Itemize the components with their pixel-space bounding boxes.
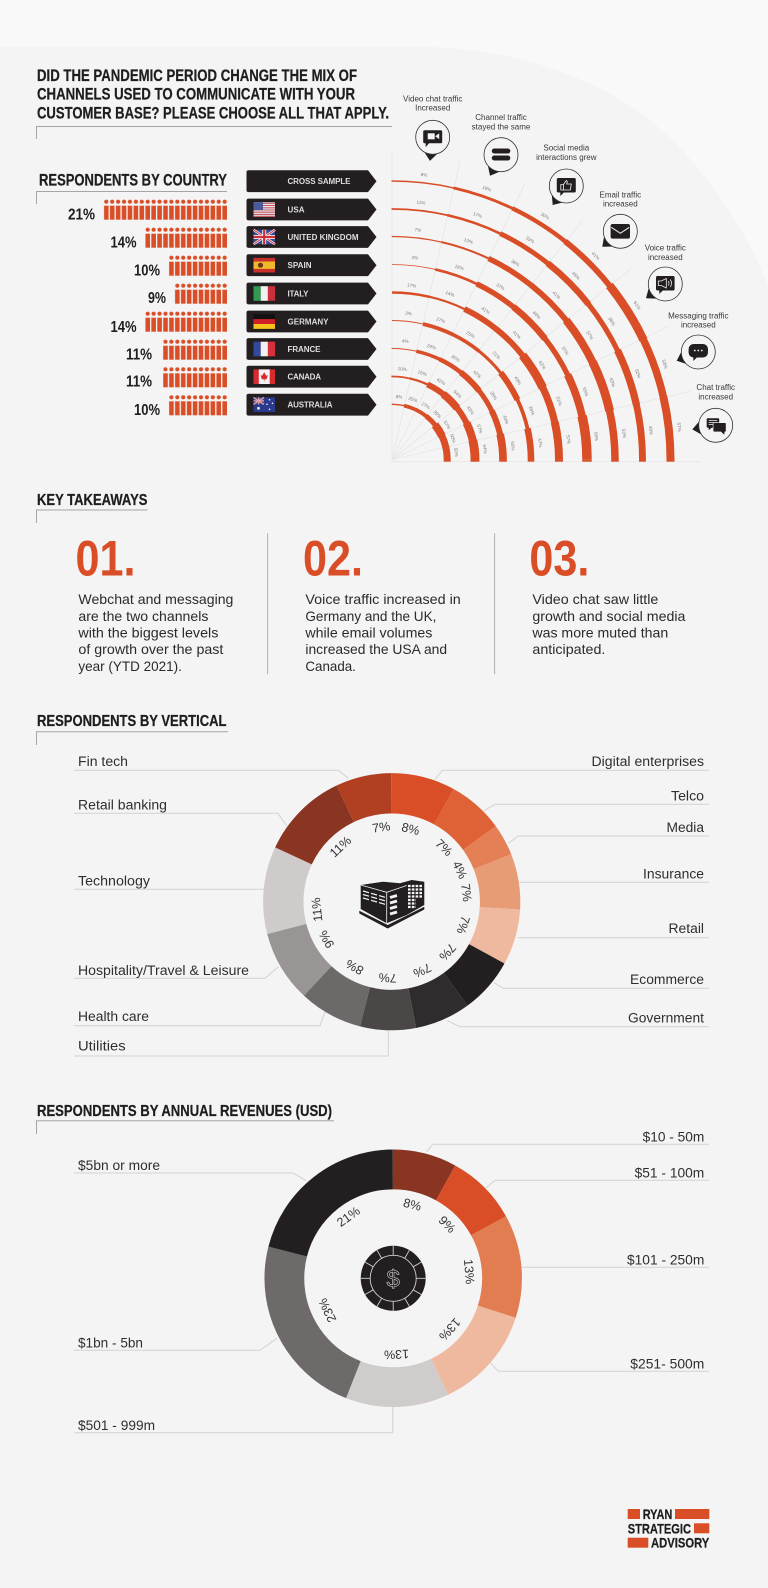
ring: Australia — [314, 382, 470, 537]
takeaway 03: 03. — [529, 531, 589, 587]
takeaway 01 — [76, 531, 233, 674]
donut percent labels: 7% — [436, 940, 459, 963]
heading: respondents by country: RESPONDENTS BY COUNTRY — [39, 172, 227, 190]
channel pin: voice: increased — [648, 253, 683, 262]
ring: Canada: 42% — [436, 377, 446, 386]
donut percent labels: 9% — [436, 1213, 458, 1236]
tag: France: FRANCE — [288, 345, 321, 354]
ring: Italy: 14% — [445, 290, 455, 298]
takeaway 02: increased the USA and — [305, 642, 447, 657]
tag: United Kingdom — [246, 226, 376, 248]
tag: USA — [246, 199, 376, 220]
channel radial chart — [1, 68, 768, 851]
vertical leader lines and labels: Government — [628, 1010, 704, 1026]
tag: Spain — [246, 254, 376, 276]
takeaway 02: Germany and the UK, — [305, 609, 436, 624]
ring: Australia: 8% — [395, 394, 403, 400]
ring: France: 24% — [426, 343, 437, 351]
logo: Ryan Strategic Advisory: RYAN — [643, 1507, 672, 1522]
channel pin: email: increased — [603, 200, 638, 209]
ring: cross sample: 41% — [591, 251, 601, 261]
vertical leader lines and labels: Hospitality/Travel & Leisure — [78, 963, 249, 978]
tag: Germany: GERMANY — [288, 317, 329, 326]
donut segments — [284, 1169, 502, 1387]
ring: Italy: 17% — [407, 283, 416, 289]
ring: Italy — [157, 225, 627, 694]
vertical leader lines and labels: Retail banking — [78, 798, 167, 812]
ring: USA: 17% — [472, 211, 483, 219]
tag: Germany — [246, 311, 376, 332]
takeaway 03 — [529, 531, 686, 657]
donut percent labels: 8% — [343, 956, 366, 978]
tag: Italy — [246, 283, 376, 304]
ring: Spain: 46% — [532, 310, 542, 320]
bar: United Kingdom 14% — [110, 228, 228, 252]
ring: Canada: 54% — [452, 389, 462, 399]
channel pin: email: Email traffic — [599, 190, 641, 199]
donut percent labels: 13% — [384, 1347, 409, 1362]
donut percent labels: 7% — [371, 819, 391, 836]
channel pin: chat: increased — [698, 392, 733, 401]
ring: Germany: 47% — [537, 438, 543, 448]
ring: Spain: 55% — [582, 387, 589, 397]
revenue leader lines and labels: $5bn or more — [78, 1158, 160, 1173]
channel pin: video chat — [403, 95, 462, 162]
donut percent labels: 7% — [458, 883, 474, 902]
takeaway 02 — [303, 531, 461, 674]
ring: Australia: 35% — [432, 409, 442, 419]
tag: Italy: ITALY — [288, 289, 309, 298]
revenue leader lines and labels — [74, 1130, 709, 1433]
revenue leader lines and labels: $501 - 999m — [78, 1418, 155, 1433]
ring: USA: 36% — [607, 316, 616, 327]
takeaway 01: are the two channels — [78, 609, 209, 624]
takeaway 02: 02. — [303, 531, 363, 587]
vertical leader lines and labels: Ecommerce — [630, 972, 704, 987]
icon: dollar coin — [361, 1246, 426, 1311]
vertical leader lines and labels — [74, 754, 709, 1056]
heading: respondents by country — [36, 172, 227, 204]
ring: United Kingdom: 63% — [609, 377, 616, 388]
bar: Italy 9% — [148, 284, 228, 307]
donut percent labels: 8% — [400, 820, 421, 838]
takeaway 03: growth and social media — [532, 609, 686, 624]
ring: United Kingdom: 53% — [621, 428, 627, 438]
ring: cross sample: 53% — [661, 359, 669, 369]
icon: dollar coin: $ — [387, 1266, 400, 1293]
ring: Italy: 57% — [565, 435, 571, 444]
donut percent labels: 7% — [432, 836, 455, 859]
channel pin: email — [597, 190, 641, 253]
tag: Australia: AUSTRALIA — [288, 401, 333, 410]
takeaway 03: was more muted than — [531, 626, 668, 641]
ring: United Kingdom — [79, 146, 705, 773]
ring: Australia: 50% — [453, 447, 459, 457]
vertical leader lines and labels: Utilities — [78, 1038, 126, 1054]
ring: USA — [40, 107, 744, 812]
ring: United Kingdom: 38% — [510, 258, 521, 268]
tag: United Kingdom: UNITED KINGDOM — [288, 233, 359, 242]
takeaway 02: while email volumes — [304, 626, 433, 641]
heading: respondents by vertical — [36, 713, 228, 745]
bar: Australia 10%: 10% — [134, 402, 160, 419]
title: DID THE PANDEMIC PERIOD CHANGE THE MIX OF — [37, 67, 357, 85]
ring: Germany: 25% — [465, 330, 476, 339]
heading: respondents by vertical: RESPONDENTS BY VERTICAL — [37, 713, 226, 730]
takeaway 02: Canada. — [305, 659, 356, 674]
heading: respondents by annual revenues: RESPONDENTS BY ANNUAL REVENUES (USD) — [37, 1103, 332, 1120]
bar: Australia 10% — [134, 395, 228, 419]
channel pin: social media: interactions grew — [536, 153, 597, 162]
channel pin: video chat: Increased — [415, 104, 450, 113]
tag: cross sample: CROSS SAMPLE — [288, 177, 351, 186]
takeaway 03: anticipated. — [532, 642, 605, 657]
vertical leader lines and labels: Technology — [78, 874, 150, 888]
ring: Canada: 57% — [476, 424, 484, 434]
bar: France 11%: 11% — [126, 346, 152, 363]
country tags — [246, 170, 376, 416]
ring: cross sample: 30% — [540, 211, 550, 221]
donut percent labels: 4% — [450, 859, 470, 881]
donut percent labels — [316, 1196, 477, 1362]
revenue leader lines and labels: $1bn - 5bn — [78, 1335, 143, 1350]
ring: cross sample: 61% — [633, 300, 642, 311]
ring: Canada: 15% — [417, 369, 427, 377]
channel pin: voice: Voice traffic — [645, 244, 686, 253]
ring: cross sample — [1, 68, 768, 851]
ring: United Kingdom: 41% — [551, 290, 561, 300]
ring: Spain: 37% — [495, 282, 506, 291]
vertical leader lines and labels: Fin tech — [78, 754, 128, 769]
bar: United Kingdom 14%: 14% — [110, 235, 137, 252]
heading: key takeaways: KEY TAKEAWAYS — [37, 492, 148, 509]
tag: Canada: CANADA — [288, 373, 321, 382]
country percent pictogram bars — [68, 200, 228, 419]
ring: cross sample: 19% — [482, 185, 492, 192]
donut percent labels: 9% — [316, 928, 337, 951]
channel pin: social media — [536, 144, 597, 210]
ring: United Kingdom: 13% — [463, 237, 474, 245]
ring: France: 35% — [489, 390, 498, 401]
ring: Germany — [197, 264, 587, 655]
logo: Ryan Strategic Advisory: ADVISORY — [651, 1536, 709, 1551]
channel pin: messaging: increased — [681, 321, 716, 330]
bar: Canada 11%: 11% — [126, 374, 152, 391]
ring: Spain: 68% — [593, 432, 599, 441]
ring: Australia: 50% — [449, 433, 457, 443]
tag: France — [246, 338, 376, 360]
donut percent labels: 8% — [402, 1196, 423, 1214]
channel pin: stayed the same: Channel traffic — [475, 113, 527, 122]
channel pin: messaging: Messaging traffic — [668, 312, 728, 321]
takeaway divider — [267, 533, 269, 674]
ring: Spain — [118, 185, 666, 734]
vertical leader lines and labels: Telco — [671, 788, 704, 804]
channel pin: messaging — [668, 312, 728, 369]
ring: France — [236, 304, 548, 615]
donut segments — [283, 793, 500, 1010]
tag: Canada — [246, 366, 376, 388]
ring: United Kingdom: 7% — [414, 227, 421, 233]
donut percent labels: 11% — [327, 834, 354, 860]
takeaway divider — [494, 533, 496, 674]
vertical donut chart — [283, 793, 500, 1010]
donut percent labels — [309, 819, 474, 985]
ring: Germany: 21% — [491, 350, 501, 360]
bar: Spain 10% — [134, 256, 228, 279]
ring: Italy: 62% — [538, 360, 547, 370]
heading: key takeaways — [36, 492, 148, 523]
ring: France: 42% — [472, 369, 482, 379]
chart spokes — [392, 154, 700, 462]
donut percent labels: 7% — [411, 960, 433, 980]
ring: Italy: 51% — [555, 396, 563, 406]
bar: Italy 9%: 9% — [148, 290, 166, 307]
donut percent labels: 13% — [461, 1259, 477, 1285]
ring: Canada: 10% — [397, 366, 407, 372]
revenue leader lines and labels: $101 - 250m — [627, 1252, 704, 1267]
ring: France: 4% — [402, 338, 409, 344]
ring: Spain: 18% — [454, 264, 464, 271]
takeaway 01: 01. — [76, 531, 136, 587]
takeaway 01: year (YTD 2021). — [78, 659, 182, 674]
channel pin: video chat: Video chat traffic — [403, 95, 462, 104]
ring: Australia: 27% — [421, 401, 431, 410]
channel pin: stayed the same — [472, 113, 531, 179]
revenue leader lines and labels: $10 - 50m — [643, 1130, 704, 1145]
ring: Germany: 26% — [528, 405, 536, 416]
tag: Australia — [246, 394, 376, 416]
ring: Germany: 3% — [405, 311, 412, 316]
ring: Spain: 3% — [411, 255, 418, 261]
ring: USA: 49% — [648, 425, 654, 435]
takeaway 01: Webchat and messaging — [78, 592, 233, 607]
donut percent labels: 11% — [309, 897, 325, 922]
donut percent labels: 21% — [334, 1204, 363, 1230]
channel pin: chat: Chat traffic — [696, 383, 735, 392]
ring: Italy: 41% — [480, 306, 491, 315]
ring: USA: 52% — [634, 368, 642, 379]
title: CHANNELS USED TO COMMUNICATE WITH YOUR — [37, 86, 355, 104]
tag: cross sample — [246, 170, 376, 192]
takeaway 03: Video chat saw little — [532, 592, 658, 607]
ring: France: 55% — [510, 441, 516, 451]
ring: France: 43% — [502, 415, 510, 425]
title — [36, 67, 392, 139]
takeaway 01: with the biggest levels — [77, 626, 219, 641]
donut percent labels: 7% — [454, 914, 472, 936]
ring: Spain: 37% — [561, 345, 570, 356]
ring: Australia: 57% — [442, 420, 452, 430]
heading: respondents by annual revenues — [36, 1103, 334, 1134]
ring: United Kingdom: 57% — [585, 330, 594, 341]
vertical leader lines and labels: Media — [666, 820, 704, 835]
vertical leader lines and labels: Digital enterprises — [592, 754, 704, 769]
bar: Germany 14%: 14% — [110, 319, 137, 336]
bar: Canada 11% — [126, 367, 228, 391]
bar: Spain 10%: 10% — [134, 262, 160, 279]
tag: USA: USA — [288, 205, 305, 214]
ring: USA: 45% — [571, 271, 581, 281]
ring: USA: 33% — [525, 235, 535, 244]
logo: Ryan Strategic Advisory — [628, 1507, 709, 1551]
bar: USA 21% — [68, 200, 228, 223]
takeaway 01: of growth over the past — [78, 642, 224, 657]
vertical leader lines and labels: Insurance — [643, 866, 704, 882]
ring: cross sample: 8% — [421, 172, 428, 178]
bar: USA 21%: 21% — [68, 206, 95, 223]
donut percent labels: 23% — [316, 1296, 339, 1325]
revenue leader lines and labels: $51 - 100m — [635, 1165, 704, 1180]
tag: Spain: SPAIN — [288, 261, 312, 270]
channel pin: stayed the same: stayed the same — [472, 122, 531, 131]
ring: Canada: 64% — [482, 444, 488, 454]
ring: cross sample: 57% — [676, 422, 682, 432]
vertical leader lines and labels: Retail — [668, 921, 704, 936]
vertical leader lines and labels: Health care — [78, 1009, 149, 1024]
revenue leader lines and labels: $251- 500m — [630, 1357, 704, 1372]
takeaway 02: Voice traffic increased in — [305, 592, 461, 607]
icon: building — [359, 880, 424, 928]
revenue donut chart — [284, 1169, 502, 1387]
bar: Germany 14% — [110, 312, 228, 336]
channel pin: voice — [641, 244, 686, 305]
ring: Germany: 43% — [513, 375, 522, 386]
donut percent labels: 13% — [436, 1315, 463, 1343]
logo: Ryan Strategic Advisory: STRATEGIC — [628, 1521, 691, 1536]
channel pin: social media: Social media — [543, 144, 590, 153]
ring: USA: 11% — [416, 200, 426, 206]
ring: Italy: 41% — [512, 330, 522, 340]
bar: France 11% — [126, 340, 228, 363]
ring: Canada: 43% — [466, 405, 475, 416]
ring: Germany: 27% — [436, 316, 446, 324]
channel pin: chat — [691, 383, 735, 442]
ring: Canada — [275, 343, 509, 576]
donut percent labels: 7% — [378, 970, 397, 985]
ring: France: 30% — [450, 354, 461, 363]
ring: Australia: 25% — [408, 396, 418, 403]
title: CUSTOMER BASE? PLEASE CHOOSE ALL THAT APPLY. — [37, 104, 389, 122]
